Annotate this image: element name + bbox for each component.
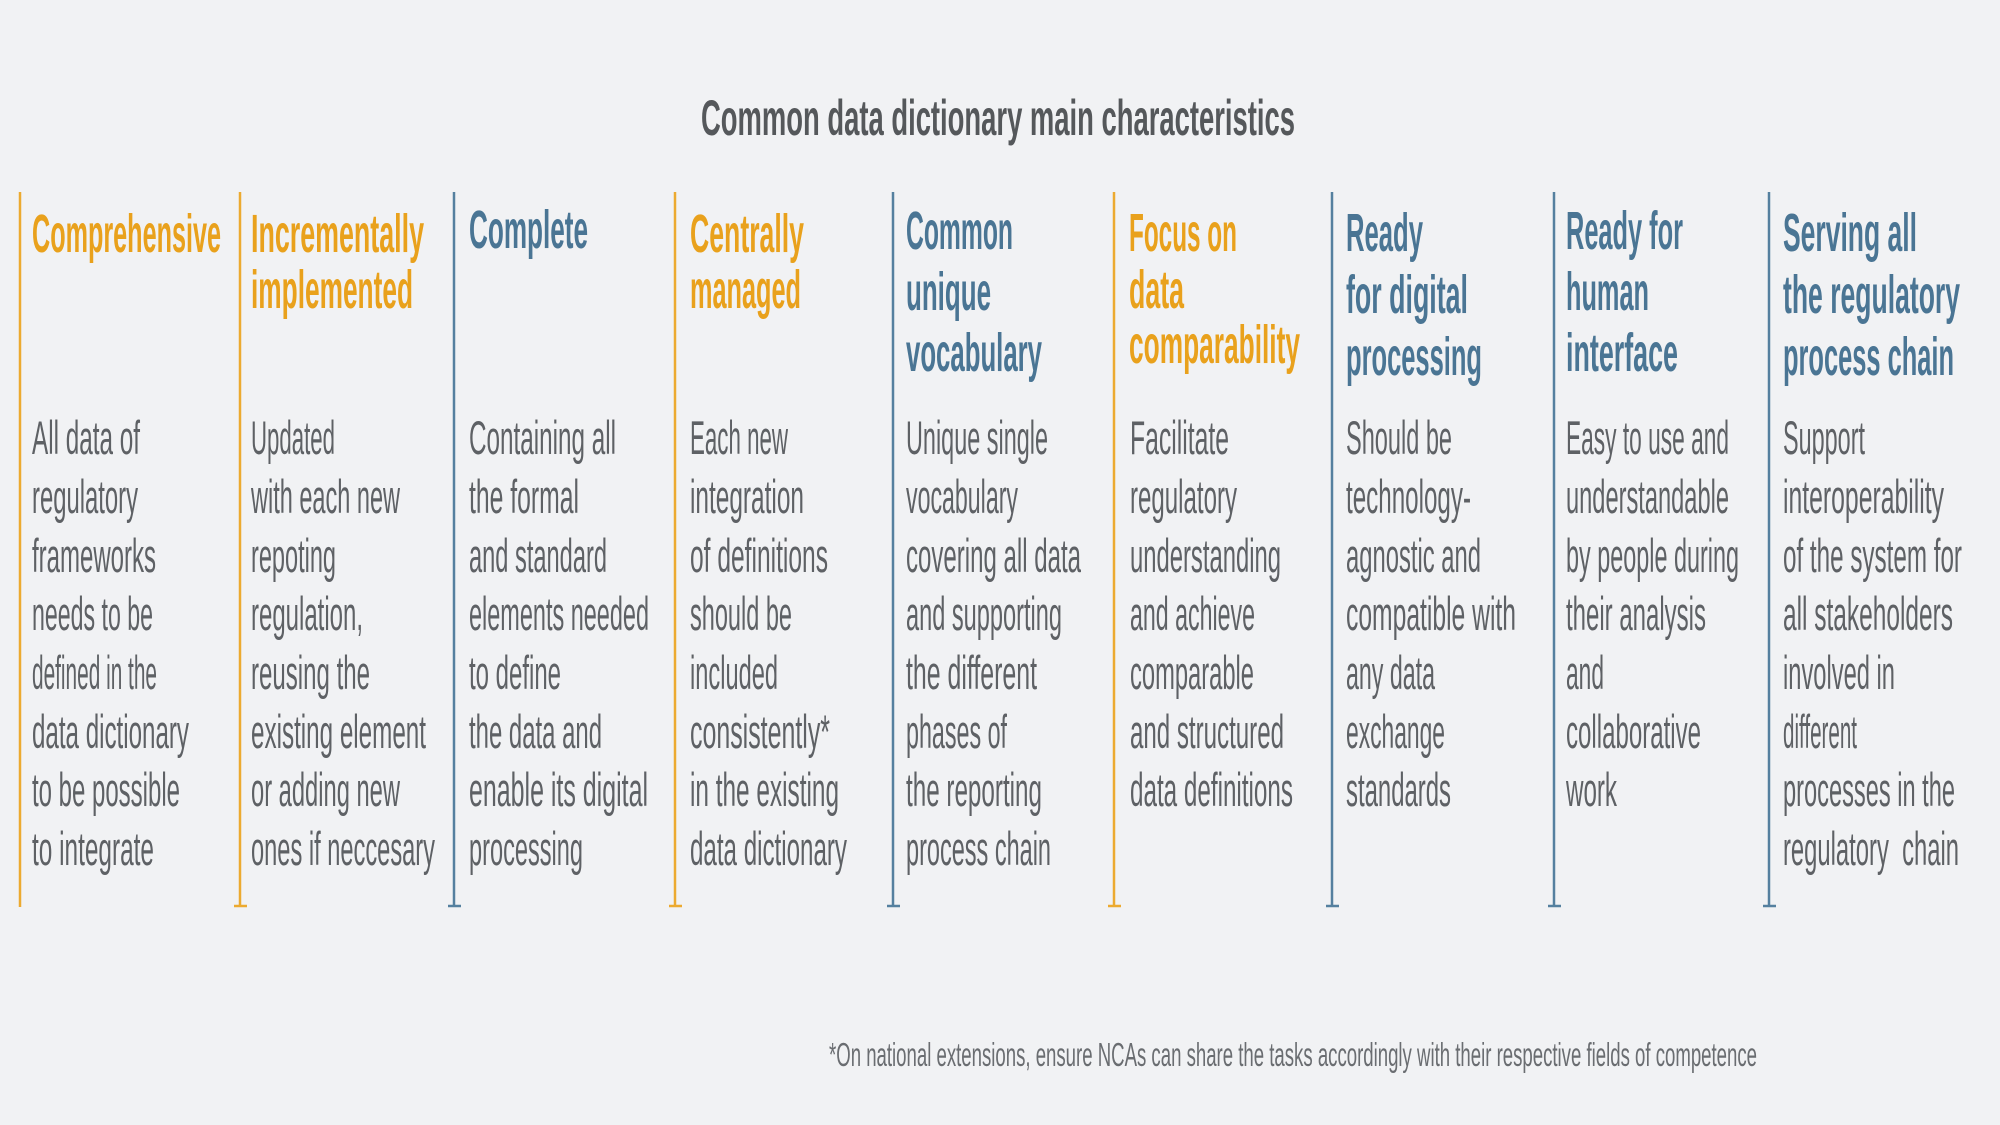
text block: Common unique vocabulary description: Unique single: [906, 411, 1048, 464]
heading: Focus on data comparability: Focus on: [1129, 203, 1237, 263]
title: Common data dictionary main characteristics: [701, 90, 1295, 146]
text block: Centrally managed description: consistently*: [690, 705, 830, 758]
panel: Incrementally implemented: Incrementally: [251, 204, 424, 264]
text block: Focus on data comparability description: and achieve: [1130, 587, 1255, 640]
heading: Ready for human interface: interface: [1566, 323, 1678, 383]
text block: Incrementally implemented description: with each new: [250, 470, 401, 523]
text block: Ready for digital processing description: Should be: [1346, 411, 1452, 464]
text: Comprehensive: [32, 204, 221, 264]
text block: Incrementally implemented description: repoting: [251, 529, 336, 582]
text block: Common unique vocabulary description: [906, 411, 1081, 875]
text block: Ready for digital processing description: exchange: [1346, 705, 1445, 758]
text block: Centrally managed description: of definitions: [690, 529, 828, 582]
text block: Centrally managed description: integration: [690, 470, 804, 523]
text block: Centrally managed description: data dictionary: [690, 822, 847, 875]
panel: Complete: Complete: [469, 200, 588, 260]
text block: Common unique vocabulary description: and supporting: [906, 587, 1062, 640]
text block: Ready for digital processing description: agnostic and: [1346, 529, 1481, 582]
text block: Comprehensive description: to integrate: [32, 822, 154, 875]
text block: Focus on data comparability description: understanding: [1130, 529, 1281, 582]
text block: Common unique vocabulary description: phases of: [906, 705, 1007, 758]
text block: Ready for human interface description: collaborative: [1566, 705, 1701, 758]
text: elements needed: [469, 587, 649, 640]
text block: Comprehensive description: data dictionary: [32, 705, 189, 758]
heading: Ready for digital processing: [1346, 203, 1482, 387]
text: by people during: [1566, 529, 1739, 582]
heading: Ready for digital processing: for digital: [1346, 265, 1468, 325]
text block: Ready for human interface description: and: [1566, 646, 1604, 699]
panel: Centrally managed: [669, 192, 847, 907]
text block: Incrementally implemented description: Updated: [251, 411, 335, 464]
text block: Comprehensive description: All data of: [32, 411, 140, 464]
text block: Ready for digital processing description: standards: [1346, 763, 1451, 816]
panel: Complete: [448, 192, 649, 907]
text block: Comprehensive description: [32, 411, 189, 875]
text: comparability: [1129, 315, 1300, 375]
text block: Comprehensive description: regulatory: [32, 470, 138, 523]
heading: Common unique vocabulary: unique: [906, 262, 991, 322]
panel: Serving all the regulatory process chain: [1763, 192, 1962, 907]
heading: Incrementally implemented: [251, 204, 424, 320]
text block: Complete description: enable its digital: [469, 763, 648, 816]
heading: Common unique vocabulary: Common: [906, 201, 1013, 261]
text block: Serving all the regulatory process chain description: involved in: [1783, 646, 1895, 699]
text block: Complete description: to define: [469, 646, 561, 699]
text block: Centrally managed description: in the existing: [690, 763, 839, 816]
text block: Incrementally implemented description: existing element: [251, 705, 426, 758]
heading: Ready for human interface: human: [1566, 262, 1649, 322]
text block: Comprehensive description: defined in the: [32, 646, 157, 699]
text block: Incrementally implemented description: reusing the: [251, 646, 370, 699]
heading: Focus on data comparability: data: [1129, 260, 1184, 320]
text block: Complete description: [469, 411, 649, 875]
panel: Centrally managed: managed: [690, 260, 801, 320]
panel: Centrally managed: Centrally: [690, 204, 804, 264]
text block: Focus on data comparability description: comparable: [1130, 646, 1254, 699]
heading: Common unique vocabulary: [906, 201, 1042, 383]
text block: Centrally managed description: Each new: [690, 411, 789, 464]
text block: Ready for human interface description: understandable: [1566, 470, 1729, 523]
panel: Focus on data comparability: [1108, 192, 1300, 907]
text block: Focus on data comparability description: [1130, 411, 1293, 816]
panel: Ready for human interface: Ready for: [1566, 201, 1683, 261]
text block: Incrementally implemented description: ones if neccesary: [251, 822, 435, 875]
text block: Ready for human interface description: their analysis: [1566, 587, 1706, 640]
text block: Comprehensive description: frameworks: [32, 529, 156, 582]
text block: Common unique vocabulary description: vocabulary: [906, 470, 1018, 523]
heading: Incrementally implemented: implemented: [251, 260, 413, 320]
text block: Focus on data comparability description: regulatory: [1130, 470, 1237, 523]
text block: Serving all the regulatory process chain description: different: [1783, 705, 1857, 758]
text block: Complete description: the formal: [469, 470, 579, 523]
panel: Comprehensive: [20, 192, 221, 907]
text block: Complete description: the data and: [469, 705, 602, 758]
text block: Incrementally implemented description: [250, 411, 435, 875]
text block: Comprehensive description: needs to be: [32, 587, 153, 640]
text block: Centrally managed description: [690, 411, 847, 875]
text block: Ready for human interface description: work: [1565, 763, 1617, 816]
text block: Common unique vocabulary description: process chain: [906, 822, 1051, 875]
text block: Centrally managed description: included: [690, 646, 778, 699]
panel: Ready for digital processing: processing: [1346, 327, 1482, 387]
heading: Ready for digital processing: Ready: [1346, 203, 1423, 263]
text block: Complete description: and standard: [469, 529, 607, 582]
text block: Ready for digital processing description: [1346, 411, 1516, 816]
text block: Common unique vocabulary description: covering all data: [906, 529, 1081, 582]
text block: Serving all the regulatory process chain description: Support: [1783, 411, 1865, 464]
text block: Ready for digital processing description: any data: [1346, 646, 1435, 699]
panel: Common unique vocabulary: vocabulary: [906, 323, 1042, 383]
text block: Incrementally implemented description: or adding new: [251, 763, 401, 816]
text block: Ready for human interface description: Easy to use and: [1566, 411, 1729, 464]
text block: Incrementally implemented description: regulation,: [251, 587, 363, 640]
text block: Serving all the regulatory process chain description: [1783, 411, 1962, 875]
heading: Focus on data comparability: [1129, 203, 1300, 375]
text block: Centrally managed description: should be: [690, 587, 792, 640]
text block: Common unique vocabulary description: the different: [906, 646, 1037, 699]
panel: Ready for human interface: [1548, 192, 1739, 907]
text block: Comprehensive description: to be possible: [32, 763, 180, 816]
text block: Complete description: Containing all: [469, 411, 616, 464]
heading: Ready for human interface: [1566, 201, 1683, 383]
text block: Complete description: processing: [469, 822, 583, 875]
panel: Common unique vocabulary: [887, 192, 1081, 907]
text block: Focus on data comparability description: Facilitate: [1130, 411, 1229, 464]
text block: Ready for digital processing description: technology-: [1346, 470, 1471, 523]
text block: Focus on data comparability description: data definitions: [1130, 763, 1293, 816]
text block: Focus on data comparability description: and structured: [1130, 705, 1284, 758]
panel: Ready for digital processing: [1326, 192, 1516, 907]
text block: Common unique vocabulary description: the reporting: [906, 763, 1042, 816]
heading: Centrally managed: [690, 204, 804, 320]
panel: Incrementally implemented: [234, 192, 435, 907]
heading: Serving all the regulatory process chain: [1783, 203, 1960, 387]
text block: Ready for human interface description: [1565, 411, 1739, 816]
text block: Ready for digital processing description: compatible with: [1346, 587, 1516, 640]
